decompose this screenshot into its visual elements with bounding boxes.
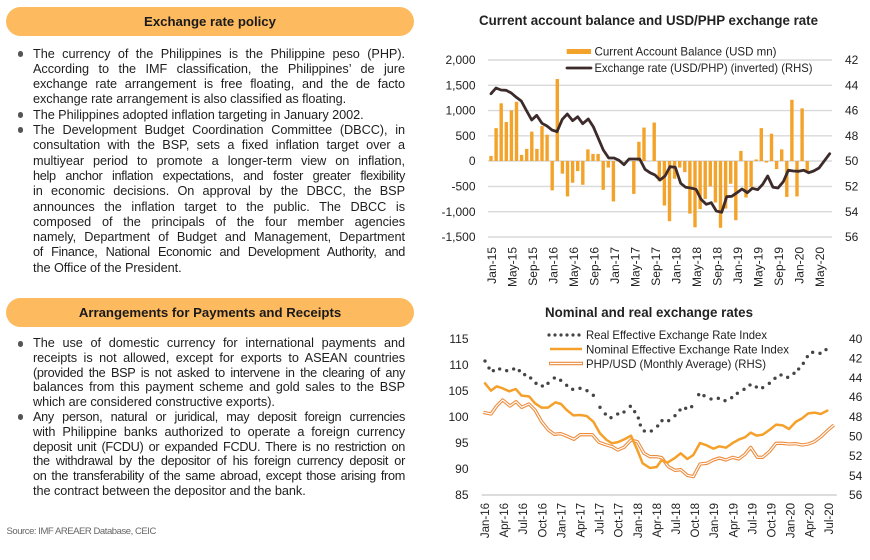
chart: nominal and real exchange rates: Jan-19 (709, 503, 721, 538)
chart: current account balance and exchange rate: May-16 (567, 247, 581, 287)
heading: Exchange rate policy: Exchange rate policy (144, 14, 276, 29)
chart: current account balance and exchange rate: -1,500 (441, 230, 476, 244)
chart: nominal and real exchange rates: Jul-17 (595, 503, 607, 534)
chart: nominal and real exchange rates: 110 (449, 358, 469, 372)
text block: exchange rate policy bullets: consultation with the BSP, sets a fixed inflation target over a (33, 138, 405, 152)
chart: nominal and real exchange rates: 90 (455, 462, 469, 476)
chart: current account balance and exchange rate: 52 (845, 180, 859, 194)
chart: nominal and real exchange rates: 95 (455, 436, 469, 450)
chart: nominal and real exchange rates: 105 (448, 384, 469, 398)
text block: exchange rate policy bullets: help anchor inflation expectations, and foster greater flexibility (33, 169, 405, 183)
chart: current account balance and exchange rate: May-15 (506, 247, 520, 287)
chart: current account balance and exchange rate: 46 (845, 104, 859, 118)
chart: nominal and real exchange rates: 100 (448, 410, 469, 424)
text block: payments and receipts bullets: on the transferability of the same abroad, except those arising from (33, 469, 405, 483)
chart: current account balance and exchange rate: Sep-18 (710, 247, 724, 286)
chart: current account balance and exchange rate: 500 (455, 129, 476, 143)
chart: current account balance and exchange rate: 2,000 (445, 53, 476, 67)
text block: exchange rate policy bullets: exchange rate arrangement is also classified as floating. (33, 92, 346, 106)
chart: current account balance and exchange rate: Jan-15 (485, 247, 499, 284)
text block: exchange rate policy bullets: the Office of the President. (33, 261, 182, 275)
text block: exchange rate policy bullets: The Development Budget Coordination Committee (DBCC), in (33, 123, 405, 137)
text block: exchange rate policy bullets: in economic decisions. On approval by the DBCC, the BSP (33, 184, 405, 198)
text block: payments and receipts bullets: with Philippine banks authorized to operate a foreign currency (33, 425, 405, 439)
chart: nominal and real exchange rates: Apr-16 (499, 503, 511, 538)
chart: current account balance and exchange rate: May-17 (628, 247, 642, 287)
text block: payments and receipts bullets: deposit unit (FCDU) or expanded FCDU. There is no restriction on (33, 440, 405, 454)
chart: nominal and real exchange rates: Jul-19 (747, 503, 759, 534)
chart: current account balance and exchange rate: Sep-15 (526, 247, 540, 286)
legend: nominal and real chart: Real Effective Exchange Rate Index (586, 328, 767, 342)
chart: nominal and real exchange rates: 46 (849, 390, 863, 404)
chart: nominal and real exchange rates: 50 (849, 430, 863, 444)
chart: current account balance and exchange rate: Jan-16 (546, 247, 560, 284)
chart: nominal and real exchange rates: 52 (849, 449, 863, 463)
chart: nominal and real exchange rates: Jan-17 (556, 503, 568, 538)
chart: nominal and real exchange rates (448, 332, 863, 538)
legend: current account chart (567, 44, 813, 75)
chart: nominal and real exchange rates: 42 (849, 352, 863, 366)
chart: nominal and real exchange rates: 48 (849, 410, 863, 424)
chart: nominal and real exchange rates: 40 (849, 332, 863, 346)
chart: current account balance and exchange rate: 48 (845, 129, 859, 143)
chart: current account balance and exchange rate: 44 (845, 78, 859, 92)
legend: nominal and real chart: Nominal Effective Exchange Rate Index (586, 342, 789, 356)
legend: current account chart: Exchange rate (USD/PHP) (inverted) (RHS) (594, 61, 813, 75)
chart: current account balance and exchange rate: Jan-20 (792, 247, 806, 284)
chart: nominal and real exchange rates: Apr-19 (728, 503, 740, 538)
text block: payments and receipts bullets: The use of domestic currency for international payments and (33, 336, 405, 350)
chart: current account balance and exchange rate: 1,500 (445, 78, 476, 92)
chart: nominal and real exchange rates: 85 (455, 488, 469, 502)
legend: nominal and real chart (547, 328, 789, 371)
chart: current account balance and exchange rate: -1,000 (441, 205, 476, 219)
chart: current account balance and exchange rate: Sep-16 (588, 247, 602, 286)
text block: exchange rate policy bullets: According to the IMF classification, the Philippines’ de jure (33, 62, 405, 76)
chart: nominal and real exchange rates: 54 (849, 469, 863, 483)
chart: nominal and real exchange rates: Jan-18 (633, 503, 645, 538)
text block: exchange rate policy bullets: composed of the principals of the four member agencies (33, 215, 405, 229)
text block: payments and receipts bullets: receipts is not allowed, except for exports to ASEAN countries (33, 351, 405, 365)
chart: current account balance and exchange rate: 42 (845, 53, 859, 67)
text block: payments and receipts bullets: the withdrawal by the depositor of his foreign currency deposit or (33, 454, 405, 468)
chart: nominal and real exchange rates: Oct-16 (537, 503, 549, 538)
text block: exchange rate policy bullets: The currency of the Philippines is the Philippine peso (PHP). (33, 46, 405, 60)
legend: nominal and real chart: PHP/USD (Monthly Average) (RHS) (586, 357, 766, 371)
chart: current account balance and exchange rate: -500 (451, 180, 476, 194)
chart: current account balance and exchange rate: May-19 (752, 247, 766, 287)
chart: nominal and real exchange rates: Jan-20 (786, 503, 798, 538)
chart: current account balance and exchange rate (441, 53, 859, 287)
chart: current account balance and exchange rate: Jan-19 (731, 247, 745, 284)
heading: Arrangements for Payments and Receipts: Arrangements for Payments and Receipts (79, 305, 341, 320)
source note: Source: IMF AREAER Database, CEIC (6, 526, 156, 537)
text block: payments and receipts bullets: (provided the BSP is not asked to intervene in the clearing of any (33, 366, 405, 380)
text block: payments and receipts bullets (18, 336, 406, 498)
chart: nominal and real exchange rates: Apr-17 (576, 503, 588, 538)
chart: current account balance and exchange rate: Sep-19 (772, 247, 786, 286)
chart: nominal and real exchange rates: Apr-20 (805, 503, 817, 538)
chart: current account balance and exchange rate: Jan-17 (608, 247, 622, 284)
chart: nominal and real exchange rates: Jul-16 (518, 503, 530, 534)
chart: nominal and real exchange rates: Oct-19 (766, 503, 778, 538)
chart: current account balance and exchange rate: 1,000 (445, 104, 476, 118)
chart: current account balance and exchange rate: May-18 (690, 247, 704, 287)
chart: nominal and real exchange rates: Jan-16 (480, 503, 492, 538)
text block: exchange rate policy bullets: multiyear period to promote a longer-term view on inflation, (33, 154, 405, 168)
chart: nominal and real exchange rates: Jul-20 (824, 503, 836, 534)
chart: current account balance and exchange rate: 50 (845, 154, 859, 168)
legend: current account chart: Current Account Balance (USD mn) (594, 44, 776, 58)
chart: nominal and real exchange rates: 56 (849, 488, 863, 502)
chart title: Nominal and real exchange rates: Nominal and real exchange rates (545, 305, 753, 320)
text block: exchange rate policy bullets: announces the inflation target to the public. The DBCC is (33, 200, 405, 214)
text block: exchange rate policy bullets (18, 46, 406, 275)
chart: nominal and real exchange rates: Jul-18 (671, 503, 683, 534)
text block: exchange rate policy bullets: exchange rate arrangement is free floating, and the de facto (33, 77, 405, 91)
text block: payments and receipts bullets: Any person, natural or juridical, may deposit foreign currencies (33, 410, 405, 424)
text block: payments and receipts bullets: the contract between the depositor and the bank. (33, 484, 306, 498)
chart title: Current account balance: Current account balance and USD/PHP exchange rate (479, 13, 818, 28)
heading: Exchange rate policy (6, 7, 414, 36)
text block: payments and receipts bullets: balances from this payment scheme and gold sales to the BSP (33, 380, 405, 394)
chart: nominal and real exchange rates: Apr-18 (652, 503, 664, 538)
heading: Arrangements for Payments and Receipts (6, 298, 414, 327)
text block: exchange rate policy bullets: namely, Department of Budget and Management, Department (33, 230, 405, 244)
chart: nominal and real exchange rates: Oct-17 (614, 503, 626, 538)
chart: current account balance and exchange rate: 0 (469, 154, 476, 168)
chart: current account balance and exchange rate: Sep-17 (649, 247, 663, 286)
chart: current account balance and exchange rate: Jan-18 (670, 247, 684, 284)
text block: exchange rate policy bullets: of Finance, National Economic and Development Authority, and (33, 245, 405, 259)
text block: payments and receipts bullets: which are considered constructive exports). (33, 395, 275, 409)
text block: exchange rate policy bullets: The Philippines adopted inflation targeting in January 2002. (33, 108, 364, 122)
chart: current account balance and exchange rate: 54 (845, 205, 859, 219)
chart: nominal and real exchange rates: 44 (849, 371, 863, 385)
chart: current account balance and exchange rate: 56 (845, 230, 859, 244)
chart: nominal and real exchange rates: 115 (449, 332, 469, 346)
chart: current account balance and exchange rate: May-20 (813, 247, 827, 287)
chart: nominal and real exchange rates: Oct-18 (690, 503, 702, 538)
